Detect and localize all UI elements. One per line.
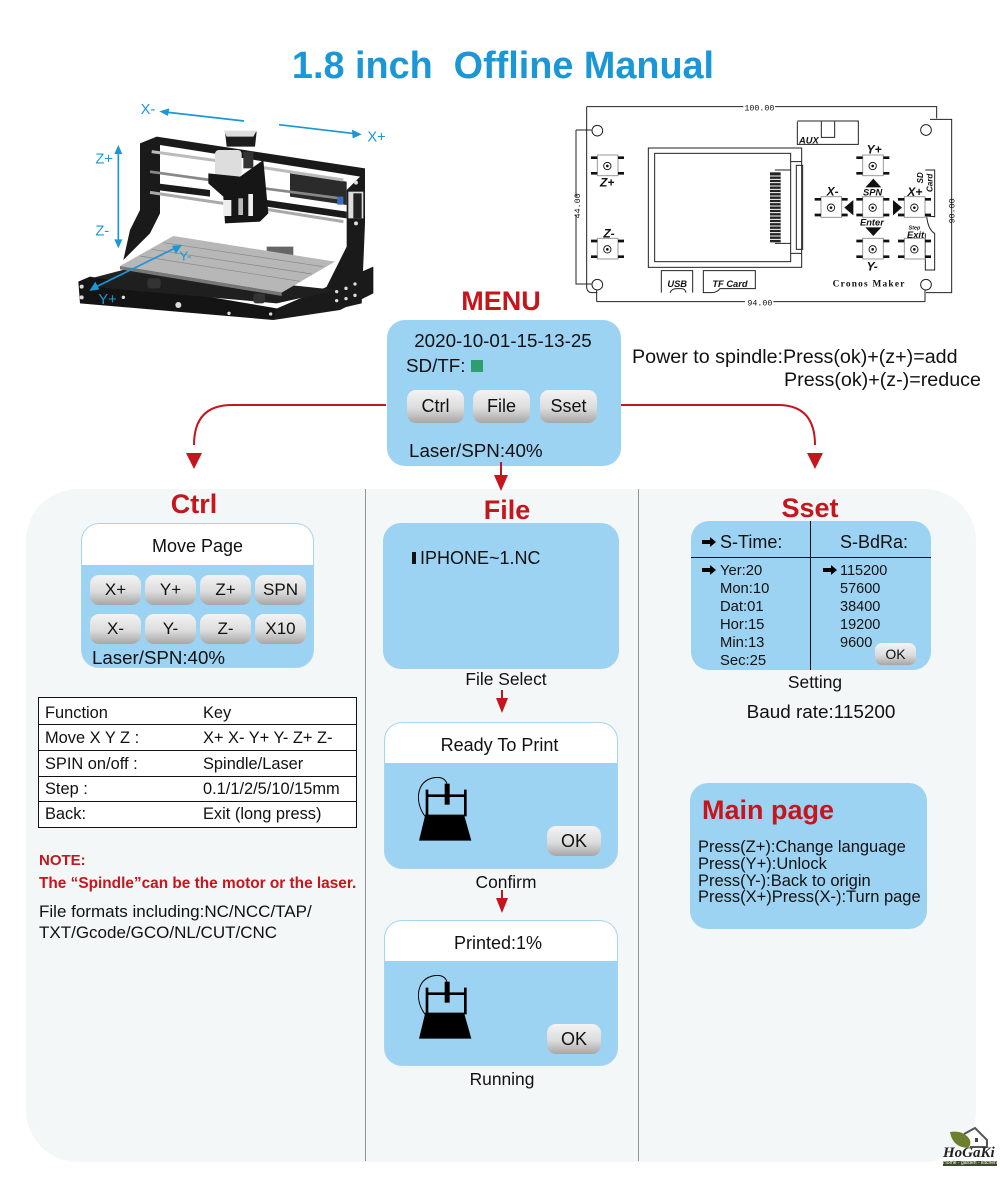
diagram: control board dimensions: Z- [602, 226, 615, 240]
button: Sset: Sset [550, 396, 587, 416]
panel: Ready To Print screen [384, 722, 618, 869]
header: Ready To Print [441, 735, 558, 755]
power readout: Laser/SPN:40% [409, 440, 543, 461]
instructions: Press(Z+):Change language [698, 838, 906, 856]
table: key functions: Spindle/Laser [203, 755, 303, 773]
note: NOTE: [39, 852, 86, 869]
SD status: SD/TF: [406, 355, 465, 376]
table: key functions: Move X Y Z : [45, 729, 139, 747]
icon: machine [418, 975, 472, 1039]
diagram: control board dimensions: Exit [907, 230, 925, 240]
button: OK [547, 1024, 601, 1054]
button: X+: X+ [105, 580, 126, 599]
diagram: control board dimensions: Y- [867, 260, 878, 274]
spindle power instructions: Press(ok)+(z-)=reduce [784, 369, 981, 391]
instructions [698, 838, 921, 906]
panel: Printed screen [384, 920, 618, 1066]
button: Z-: Z- [217, 619, 234, 638]
button: X10: X10 [265, 619, 296, 638]
button: Y+: Y+ [160, 580, 181, 599]
panel: file select screen [383, 523, 619, 669]
illustration: CNC machine with axes: Y+ [98, 292, 117, 308]
diagram: control board dimensions: 94.00 [747, 299, 772, 309]
button: Sset [540, 390, 597, 423]
diagram: control board dimensions: TF Card [712, 279, 748, 289]
button: SPN [255, 575, 306, 605]
illustration: CNC machine with axes: X+ [367, 130, 386, 146]
button: File: File [487, 396, 516, 416]
heading: File: File [484, 495, 530, 525]
diagram: control board dimensions: Y+ [867, 142, 882, 156]
instructions: Press(Y-):Back to origin [698, 872, 871, 890]
diagram: control board dimensions: Enter [860, 217, 885, 227]
logo: HoGaKi [942, 1126, 997, 1166]
button: OK: OK [561, 831, 587, 851]
note: TXT/Gcode/GCO/NL/CUT/CNC [39, 923, 277, 942]
button: Ctrl: Ctrl [422, 396, 450, 416]
button: OK [547, 826, 601, 856]
caption: Running: Running [470, 1069, 534, 1089]
button: Y- [145, 614, 196, 644]
heading: Sset: Sset [781, 493, 839, 523]
diagram: control board dimensions: X+ [906, 185, 922, 199]
diagram: control board dimensions: SPN [863, 187, 882, 197]
button: X- [90, 614, 141, 644]
diagram: control board dimensions: USB [667, 279, 687, 289]
button: X+ [90, 575, 141, 605]
illustration: CNC machine with axes: X- [141, 102, 155, 118]
diagram: control board dimensions: Card [926, 173, 935, 192]
illustration: CNC machine with axes: Z+ [95, 151, 113, 167]
column headers: S-Time: [720, 532, 782, 552]
table: key functions: SPIN on/off : [45, 755, 138, 773]
header: Printed:1% [454, 933, 542, 953]
table: key functions: X+ X- Y+ Y- Z+ Z- [203, 729, 333, 747]
button: OK [875, 643, 916, 665]
date and time: 2020-10-01-15-13-25 [414, 330, 592, 351]
diagram: control board dimensions: 44.00 [573, 193, 583, 218]
instructions: Press(Y+):Unlock [698, 855, 827, 873]
power readout: Laser/SPN:40% [92, 647, 225, 668]
button: Z+ [200, 575, 251, 605]
header [385, 723, 617, 763]
button: Z+: Z+ [215, 580, 236, 599]
diagram: control board dimensions: Step [909, 225, 921, 231]
panel: lower background [26, 489, 976, 1162]
cursor [412, 552, 416, 564]
button: OK: OK [561, 1029, 587, 1049]
diagram: control board dimensions: AUX [798, 136, 819, 146]
diagram: control board dimensions: 100.00 [744, 104, 774, 114]
button: Z- [200, 614, 251, 644]
panel: settings screen: S-BdRa: [840, 532, 908, 552]
diagram: control board dimensions: Z+ [599, 176, 614, 190]
table: key functions [38, 697, 357, 828]
arrow markers [702, 537, 837, 575]
switches [591, 155, 931, 259]
button: OK: OK [885, 646, 906, 662]
table: key functions: Key [203, 704, 231, 722]
header [82, 524, 313, 565]
title: 1.8 inch Offline Manual [292, 45, 714, 87]
illustration: CNC machine with axes: Y- [179, 249, 191, 264]
button: SPN: SPN [263, 580, 298, 599]
icon: machine [418, 777, 472, 841]
button: Y+ [145, 575, 196, 605]
header: Move Page [152, 536, 243, 556]
note: The “Spindle”can be the motor or the laser. [39, 875, 356, 892]
diagram: control board dimensions [573, 104, 958, 309]
heading: Ctrl: Ctrl [171, 489, 217, 519]
table: key functions: Back: [45, 805, 86, 823]
table: key functions: 0.1/1/2/5/10/15mm [203, 780, 340, 798]
diagram: control board dimensions: 90.00 [948, 198, 958, 223]
panel: settings screen [691, 521, 931, 670]
table: key functions: Step : [45, 780, 88, 798]
spindle power instructions: Power to spindle:Press(ok)+(z+)=add [632, 346, 958, 368]
panel: Main page [690, 783, 927, 929]
diagram: control board dimensions: Cronos Maker [833, 280, 904, 290]
panel: menu screen [387, 320, 621, 466]
button: File [473, 390, 530, 423]
illustration: CNC machine with axes: Z- [95, 224, 109, 240]
header [385, 921, 617, 961]
baud rate: Baud rate:115200 [747, 702, 895, 723]
SD indicator [471, 360, 483, 372]
note [39, 852, 356, 942]
table: key functions: Exit (long press) [203, 805, 321, 823]
table: key functions: Function [45, 704, 108, 722]
button: Ctrl [407, 390, 464, 423]
caption: Setting: Setting [788, 672, 842, 692]
caption: File Select: File Select [465, 669, 547, 689]
button: X10 [255, 614, 306, 644]
baud values: 115200 57600 38400 19200 9600 [840, 563, 887, 651]
caption: Confirm: Confirm [476, 872, 536, 892]
diagram: control board dimensions: SD [916, 172, 925, 183]
spindle power instructions [632, 346, 981, 391]
illustration: CNC machine with axes [78, 102, 386, 320]
file name: IPHONE~1.NC [420, 548, 541, 568]
panel: Move Page screen [81, 523, 314, 668]
note: File formats including:NC/NCC/TAP/ [39, 902, 312, 921]
instructions: Press(X+)Press(X-):Turn page [698, 888, 921, 906]
button: X-: X- [107, 619, 124, 638]
button: Y-: Y- [163, 619, 178, 638]
diagram: control board dimensions: X- [826, 184, 839, 198]
heading: MENU: MENU [461, 286, 541, 316]
logo: HoGaKi: HoGaKi [943, 1145, 995, 1161]
heading: Main page [702, 795, 834, 825]
time values: Yer:20 Mon:10 Dat:01 Hor:15 Min:13 Sec:25 [720, 563, 769, 669]
